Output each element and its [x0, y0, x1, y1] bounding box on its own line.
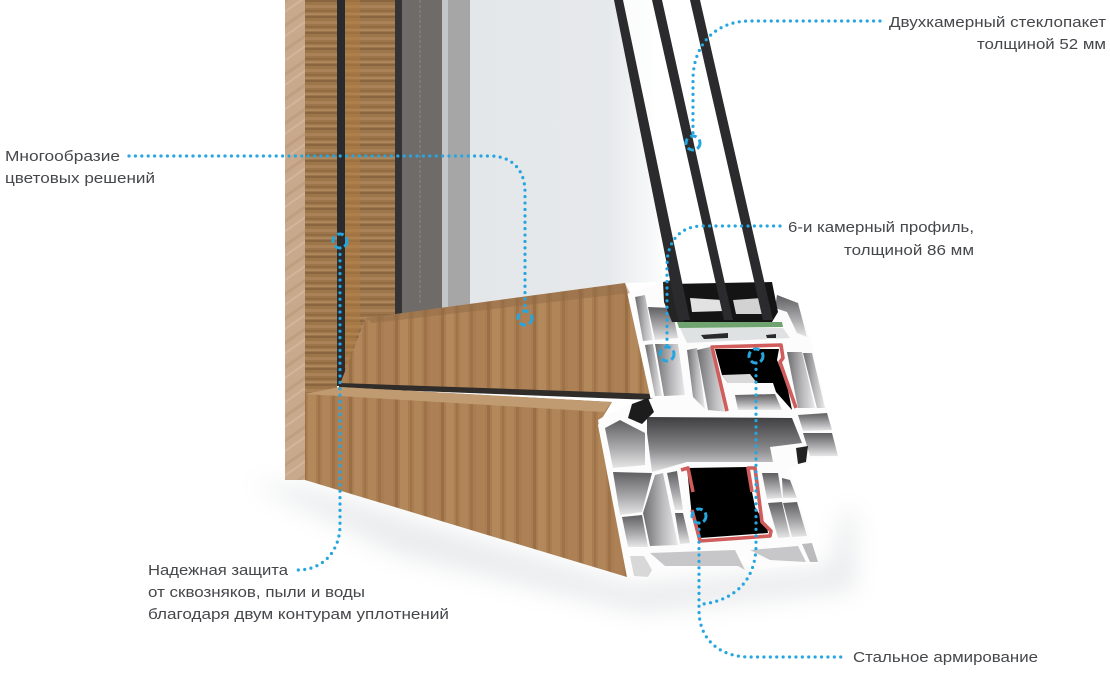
- callout line: steel: [692, 349, 845, 657]
- marker ring lower: [692, 509, 706, 523]
- text: seals: Надежная защита: [148, 562, 289, 579]
- marker ring upper: [749, 349, 763, 363]
- sash sill, wood: [339, 283, 654, 400]
- gasket: [628, 398, 654, 424]
- text: colours: цветовых решений: [5, 170, 155, 187]
- callout line: colours: [129, 156, 532, 325]
- callout line: profile: [660, 226, 780, 361]
- vertical frame: [285, 0, 470, 480]
- text: glazing: толщиной 52 мм: [977, 36, 1106, 53]
- text: glazing: Двухкамерный стеклопакет: [889, 14, 1106, 31]
- text: profile: толщиной 86 мм: [844, 242, 974, 259]
- sash chambers: [635, 295, 653, 341]
- callout line: seal: [298, 234, 347, 570]
- frame sill, wood: [305, 387, 627, 577]
- text: colours: [5, 148, 155, 187]
- frame chambers: [605, 420, 645, 468]
- marker ring: [518, 311, 532, 325]
- text: profile: [788, 219, 974, 259]
- sash steel: [715, 349, 792, 410]
- text: seals: благодаря двум контурам уплотнений: [148, 606, 449, 623]
- text: glazing: [889, 14, 1106, 53]
- profile white body: [598, 282, 838, 578]
- text: colours: Многообразие: [5, 148, 120, 165]
- glazing bed: [677, 322, 783, 328]
- marker ring: [660, 347, 674, 361]
- text: seals: от сквозняков, пыли и воды: [148, 584, 365, 601]
- marker ring: [333, 234, 347, 248]
- text: seals: [148, 562, 449, 623]
- glass pane bars: [614, 0, 773, 320]
- glass panes: [619, 0, 760, 290]
- frame steel: [687, 467, 768, 538]
- seal line: [339, 383, 654, 400]
- frame feet: [630, 556, 652, 577]
- floor shadow: [250, 482, 855, 612]
- glass background: [470, 0, 662, 304]
- callout line: glazing: [686, 21, 880, 150]
- marker ring: [686, 136, 700, 150]
- frame large chamber: [647, 417, 802, 472]
- text: profile: 6-и камерный профиль,: [788, 219, 974, 236]
- window profile section: [598, 280, 838, 578]
- text: steel: Стальное армирование: [853, 649, 1038, 666]
- outer white edge: [629, 294, 652, 398]
